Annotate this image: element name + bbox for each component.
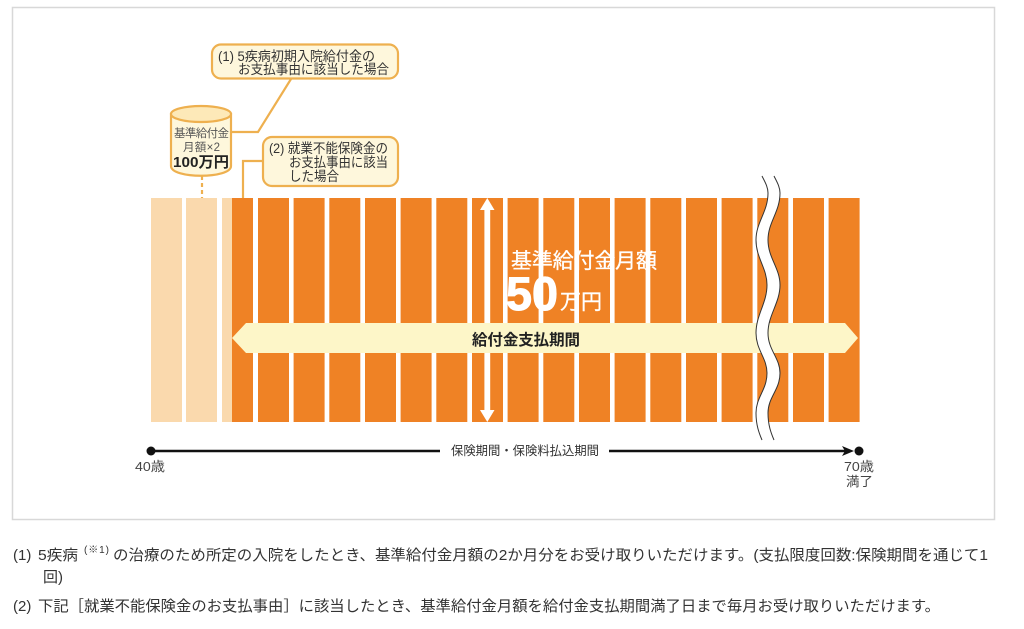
callout (2): (2) 就業不能保険金の — [269, 141, 388, 156]
icon: cylinder with lump-sum benefit: 基準給付金 — [174, 126, 230, 140]
icon: cylinder with lump-sum benefit — [171, 106, 231, 176]
benefit amount label: 50 — [506, 267, 558, 320]
wavy break mark — [756, 176, 780, 440]
insurance period timeline: 満了 — [846, 474, 873, 489]
callout (1): (1) 5疾病初期入院給付金の — [218, 49, 375, 64]
footnotes: (1) — [13, 547, 31, 564]
callout (1): お支払事由に該当した場合 — [238, 62, 389, 77]
insurance period timeline: 70歳 — [844, 459, 874, 474]
insurance period timeline — [135, 444, 874, 489]
insurance period timeline: 保険期間・保険料払込期間 — [451, 444, 599, 458]
callout (1) — [212, 44, 398, 78]
insurance period timeline: 40歳 — [135, 459, 165, 474]
benefit payment period band: 給付金支払期間 — [472, 330, 580, 349]
callout (2) — [263, 137, 398, 186]
icon: cylinder with lump-sum benefit: 月額×2 — [183, 140, 220, 154]
white double-headed vertical arrow — [480, 198, 494, 422]
orange monthly benefit bars — [232, 198, 860, 422]
pale bars before benefit period — [151, 198, 234, 422]
footnotes: (※1) — [84, 545, 109, 556]
benefit amount label: 万円 — [560, 291, 602, 314]
footnotes: 5疾病 — [38, 547, 78, 564]
footnotes: の治療のため所定の入院をしたとき、基準給付金月額の2か月分をお受け取りいただけます。(支払限度回数:保険期間を通じて1 — [113, 547, 988, 564]
benefit amount label: 基準給付金月額 — [511, 250, 657, 273]
callout (2): した場合 — [289, 169, 339, 184]
footnotes: (2) — [13, 598, 31, 615]
benefit amount label — [506, 250, 657, 320]
leader lines — [202, 79, 291, 198]
icon: cylinder with lump-sum benefit: 100万円 — [173, 154, 229, 171]
footnotes: 下記［就業不能保険金のお支払事由］に該当したとき、基準給付金月額を給付金支払期間満了日まで毎月お受け取りいただけます。 — [38, 598, 940, 615]
benefit payment period band — [232, 323, 858, 353]
callout (2): お支払事由に該当 — [289, 155, 388, 170]
footnotes — [13, 545, 988, 615]
footnotes: 回) — [43, 569, 63, 586]
diagram frame — [12, 8, 994, 520]
